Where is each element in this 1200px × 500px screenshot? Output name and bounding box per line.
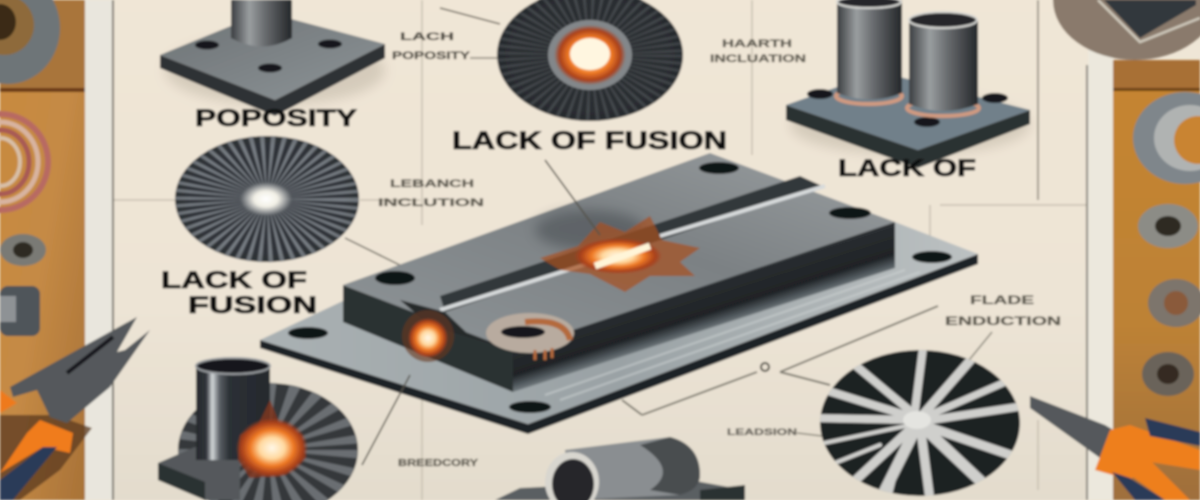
icon: nut right middle <box>1148 279 1200 327</box>
icon: pliers right <box>1030 396 1200 500</box>
panel: left radial fracture disc <box>175 136 359 262</box>
callout: lach poposity <box>392 31 471 62</box>
arrow: two-segment leader lower center <box>622 306 938 415</box>
heading: LACK OF FUSION left: FUSION <box>188 292 317 319</box>
icon: grey ring top left <box>0 0 60 84</box>
panel: top-right two pipes on plate <box>786 0 1030 168</box>
arrow: leader from callout to circle <box>470 57 497 59</box>
panel: bottom-left pipe with weld burst <box>158 358 358 500</box>
left face of block <box>343 285 513 392</box>
smoke around weld <box>535 210 645 250</box>
callout: lebanch inclusion: INCLUTION <box>378 197 484 209</box>
right face of block <box>513 222 895 392</box>
heading: LACK OF FUSION left: LACK OF <box>161 267 307 294</box>
icon: nut right lower <box>1142 352 1194 396</box>
arrow: leader from flade to disc <box>965 332 992 365</box>
copper ring hole <box>486 313 574 360</box>
weld spark left <box>402 310 454 362</box>
heading: POPOSITY: POPOSITY <box>195 105 357 132</box>
callout: haarth inclusion <box>710 38 806 65</box>
callout: flade enduction <box>945 293 1061 328</box>
heading: LACK OF right: LACK OF <box>838 155 976 182</box>
icon: pliers left <box>0 317 150 500</box>
panel: bottom-center horizontal pipe <box>495 437 745 500</box>
weld spark center <box>540 216 700 292</box>
icon: node marker <box>761 363 769 371</box>
panel: central grooved weld block <box>260 153 978 434</box>
groove <box>440 176 822 312</box>
callout: breedcory: BREEDCORY <box>398 458 478 469</box>
icon: copper coil <box>0 114 48 210</box>
dark step in front of lower tier <box>400 300 513 350</box>
arrow: leader from bottom-left disc to weld <box>362 375 410 465</box>
streaks on plate <box>545 270 920 400</box>
icon: small nut left <box>0 234 46 266</box>
callout: haarth inclusion: INCLUATION <box>710 53 806 65</box>
callout: flade enduction: FLADE <box>970 293 1034 307</box>
callout: lebanch inclusion: LEBANCH <box>390 178 474 190</box>
icon: metal disc top right <box>1053 0 1200 60</box>
callout: lach poposity: POPOSITY <box>392 50 471 62</box>
callout: lach poposity: LACH <box>400 31 454 43</box>
left wooden workbench <box>0 0 114 500</box>
arrow: leader from leadsion to disc <box>797 433 822 436</box>
top surface of block <box>343 153 895 350</box>
callout: lebanch inclusion <box>378 178 484 209</box>
callout: flade enduction: ENDUCTION <box>945 314 1061 328</box>
icon: ring right <box>1133 92 1200 184</box>
heading: LACK OF FUSION left <box>161 267 317 319</box>
arrow: leader to center weld <box>545 160 600 235</box>
panel: top-left pipe on plate <box>160 0 385 116</box>
panel: bottom-right black and white fracture disc <box>818 348 1022 498</box>
callout: leadsion: LEADSION <box>727 427 797 437</box>
heading: LACK OF FUSION center: LACK OF FUSION <box>452 127 727 155</box>
icon: nut right top <box>1138 204 1198 248</box>
panel: top circular weld with orange core <box>497 0 683 121</box>
icon: bolt left <box>0 286 40 336</box>
arrow: leader to top circle <box>440 8 500 24</box>
right wooden workbench <box>1037 0 1200 500</box>
callout: haarth inclusion: HAARTH <box>722 38 792 50</box>
arrow: leader from left disc to plate <box>345 238 420 275</box>
